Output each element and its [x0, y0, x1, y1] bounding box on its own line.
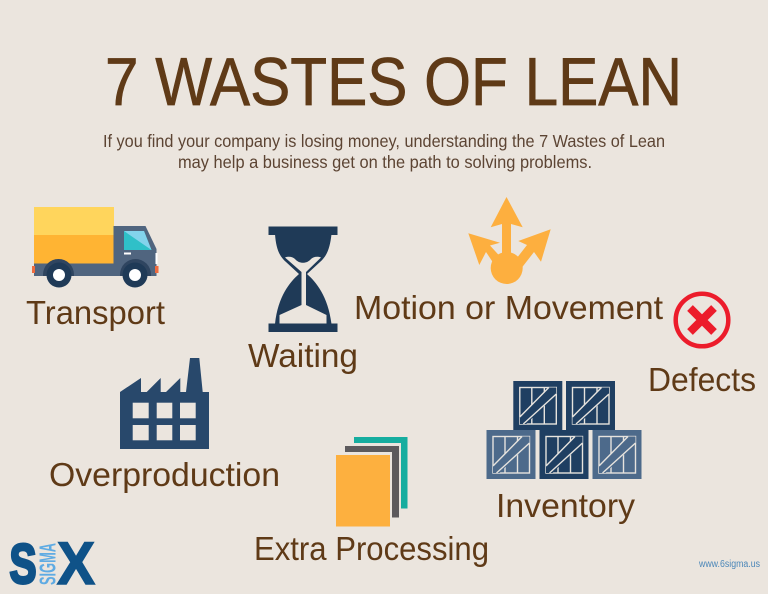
icon: truck: [32, 207, 158, 288]
title: 7 WASTES OF LEAN: [105, 44, 682, 120]
subtitle: If you find your company is losing money, understanding the 7 Wastes of Lean: [103, 131, 665, 151]
icon: motion arrows: [468, 197, 551, 284]
label: Defects: Defects: [648, 361, 756, 398]
label: Extra Processing: Extra Processing: [254, 530, 489, 567]
label: Transport: Transport: [26, 294, 165, 331]
icon: stacked documents: [336, 437, 408, 526]
website url: www.6sigma.us: [698, 559, 760, 570]
logo: Six Sigma: S: [10, 532, 36, 594]
subtitle: [103, 131, 665, 172]
label: Inventory: Inventory: [496, 487, 636, 524]
logo: Six Sigma: [10, 530, 95, 594]
label: Overproduction: Overproduction: [49, 456, 280, 493]
icon: factory: [120, 358, 209, 449]
icon: defects red x: [676, 294, 728, 346]
icon: hourglass: [268, 226, 338, 332]
logo: Six Sigma: SIGMA: [34, 543, 60, 585]
label: Motion or Movement: Motion or Movement: [354, 289, 663, 326]
icon: inventory crates: [486, 381, 642, 479]
subtitle: may help a business get on the path to solving problems.: [178, 152, 592, 172]
label: Waiting: Waiting: [248, 337, 358, 374]
